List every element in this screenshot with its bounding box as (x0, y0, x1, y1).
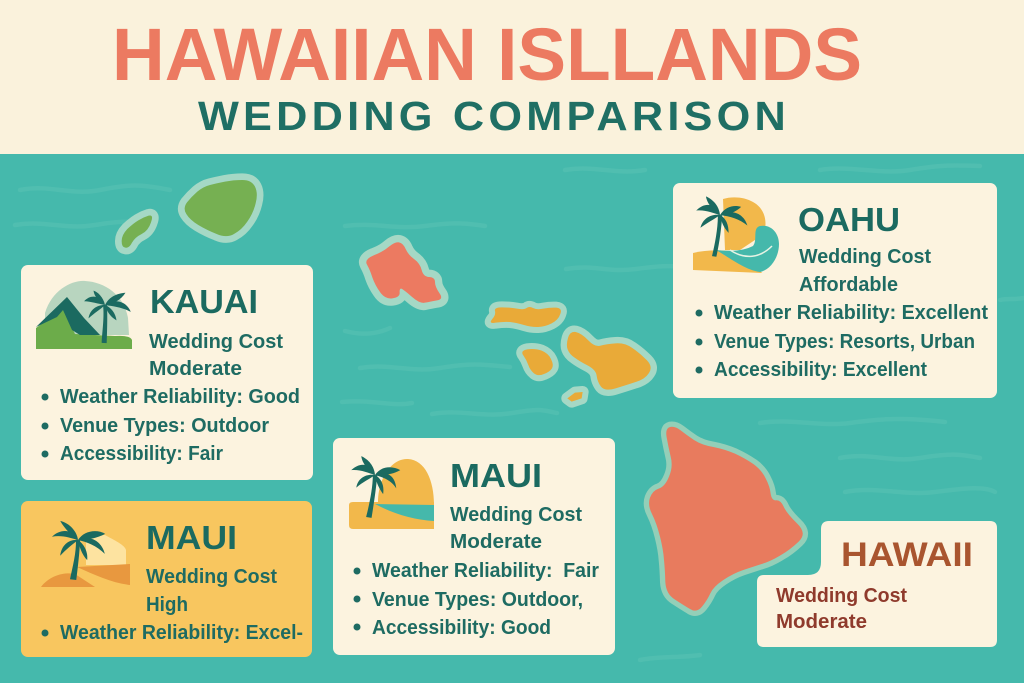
wedding cost: Oahu: Wedding Cost (799, 246, 931, 268)
bullet list: Kauai (42, 386, 300, 465)
panel: Hawaii (757, 521, 997, 647)
island: Maui (567, 332, 651, 390)
wedding cost: Hawaii: Moderate (776, 611, 867, 633)
bullet list: Kauai: Venue Types: Outdoor (60, 415, 269, 437)
icon: Oahu palm, sun and wave (690, 195, 779, 273)
icon: Maui palm and dunes (41, 520, 130, 587)
panel: Kauai (21, 265, 313, 480)
wedding cost: Maui high: High (146, 594, 188, 616)
island: Kahoolawe (567, 392, 583, 402)
wedding cost: Maui moderate: Wedding Cost (450, 504, 582, 526)
island: Kauai (185, 180, 257, 236)
icon: Kauai mountain and palm (36, 281, 132, 349)
ocean background (0, 154, 1024, 683)
island: Oahu (366, 242, 441, 303)
panel: Oahu (673, 183, 997, 398)
bullet list: Kauai: Accessibility: Fair (60, 443, 223, 465)
wedding cost: Maui high (146, 566, 277, 616)
island: Big Island of Hawaii (649, 427, 803, 611)
bullet list: Maui high: Weather Reliability: Excel- (60, 622, 303, 644)
wedding cost: Maui moderate: Moderate (450, 531, 542, 553)
title: HAWAIIAN ISLLANDS (112, 13, 862, 96)
wedding cost: Maui moderate (450, 504, 582, 553)
wedding cost: Kauai (149, 331, 283, 380)
heading: Maui moderate cost: MAUI (450, 457, 542, 494)
bullet list: Kauai: Weather Reliability: Good (60, 386, 300, 408)
wedding cost: Oahu: Affordable (799, 274, 898, 296)
wedding cost: Hawaii (776, 585, 907, 633)
wedding cost: Oahu (799, 246, 931, 296)
heading: Maui high cost: MAUI (146, 519, 237, 556)
wedding cost: Maui high: Wedding Cost (146, 566, 277, 588)
heading: Hawaii: HAWAII (841, 536, 973, 574)
bullet list: Maui moderate (354, 560, 599, 639)
panel: Maui high cost (21, 501, 312, 657)
subtitle: WEDDING COMPARISON (198, 93, 790, 139)
bullet list: Maui moderate: Venue Types: Outdoor, (372, 589, 583, 611)
title (112, 13, 862, 139)
bullet list: Oahu (696, 302, 988, 381)
heading: Oahu: OAHU (798, 201, 900, 238)
bullet list: Oahu: Accessibility: Excellent (714, 359, 927, 381)
bullet list: Maui moderate: Accessibility: Good (372, 617, 551, 639)
wedding cost: Kauai: Moderate (149, 358, 242, 380)
icon: Maui palm, sun and beach (344, 455, 434, 529)
wedding cost: Kauai: Wedding Cost (149, 331, 283, 353)
island: Niihau (122, 215, 152, 248)
bullet list: Oahu: Weather Reliability: Excellent (714, 302, 988, 324)
bullet list: Maui moderate: Weather Reliability: Fair (372, 560, 599, 582)
panel: Maui moderate cost (333, 438, 615, 655)
island: Lanai (522, 349, 553, 375)
bullet list: Oahu: Venue Types: Resorts, Urban (714, 331, 975, 353)
header band (0, 0, 1024, 154)
wedding cost: Hawaii: Wedding Cost (776, 585, 907, 607)
island: Molokai (491, 307, 561, 327)
heading: Kauai: KAUAI (150, 283, 258, 320)
